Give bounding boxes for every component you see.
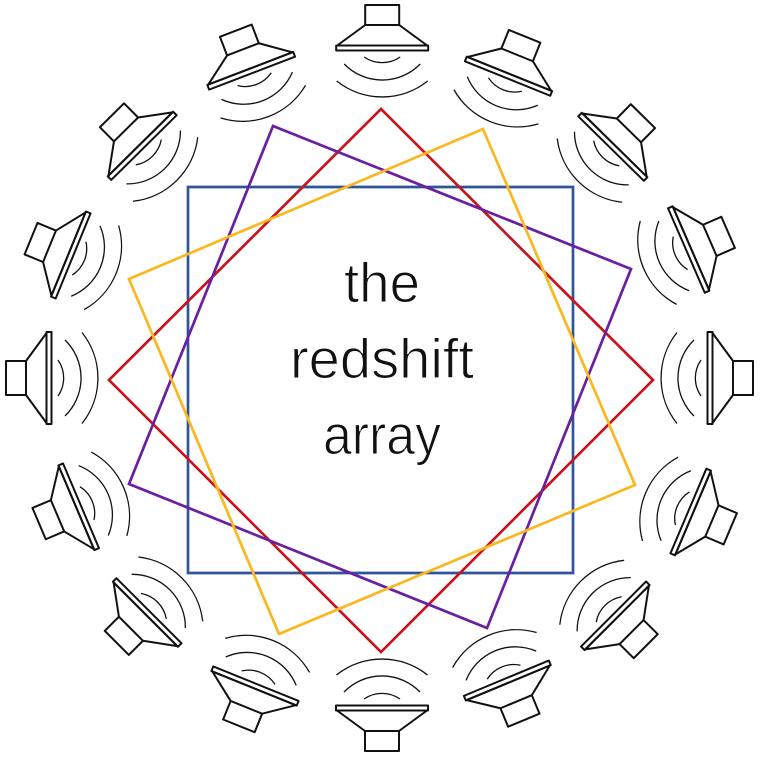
speaker 12 xyxy=(21,445,142,566)
purple square xyxy=(129,126,631,628)
speaker 1 xyxy=(336,5,428,97)
speaker 8 xyxy=(446,618,566,738)
speaker 10 xyxy=(196,623,316,743)
yellow square xyxy=(129,129,635,634)
speaker 14 xyxy=(14,196,134,316)
speaker 3 xyxy=(546,84,676,214)
speaker 4 xyxy=(626,190,746,311)
title line: the: the xyxy=(344,251,420,314)
speaker 6 xyxy=(628,451,748,571)
title line: redshift: redshift xyxy=(290,327,474,390)
speaker 16 xyxy=(193,14,312,133)
speaker 5 xyxy=(661,332,753,424)
speaker 7 xyxy=(548,549,678,679)
blue square xyxy=(188,187,573,573)
speaker 15 xyxy=(79,83,209,213)
speaker 2 xyxy=(448,19,567,139)
title xyxy=(290,251,474,466)
speaker 13 xyxy=(6,332,98,424)
speaker 11 xyxy=(84,545,214,675)
red square xyxy=(109,109,653,652)
speaker 9 xyxy=(336,659,428,751)
title line: array: array xyxy=(323,403,441,466)
